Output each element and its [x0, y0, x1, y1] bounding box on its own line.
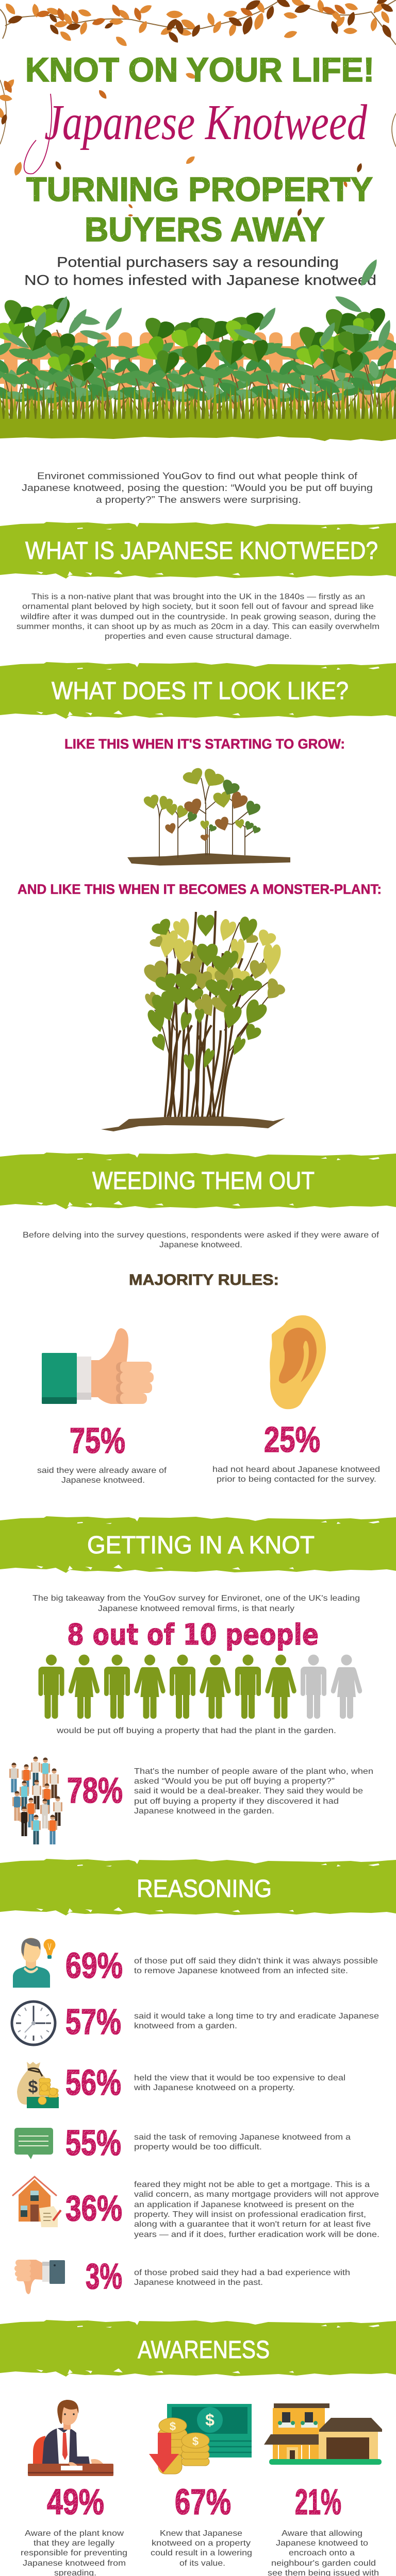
reason: 57%: said it would take a long time to try and eradicate Japanese: [134, 2012, 379, 2021]
caption: said they were already aware of: [37, 1466, 167, 1475]
subheading: majority rules: MAJORITY RULES:: [129, 1272, 279, 1289]
small leaf clusters: [0, 331, 396, 416]
reason: 3%: Japanese knotweed in the past.: [134, 2278, 263, 2287]
text block: encroach onto a: [289, 2549, 355, 2557]
text block: Japanese knotweed from: [23, 2559, 126, 2568]
pictogram: 8 of 10 people: [38, 1655, 362, 1719]
text block: [268, 2529, 379, 2576]
text block: Knew that Japanese: [160, 2529, 242, 2538]
icon: thumbs up: [42, 1328, 154, 1404]
grass: [0, 379, 396, 421]
subtitle: [24, 254, 376, 288]
caption: [37, 1466, 167, 1485]
reason: 57%: 57%: [65, 2002, 121, 2042]
reason: 3%: [86, 2256, 350, 2296]
reason: 56%: [65, 2062, 345, 2103]
subtitle: Potential purchasers say a resounding: [57, 254, 339, 270]
reason: 56%: with Japanese knotweed on a property.: [134, 2083, 295, 2092]
reason: 69%: to remove Japanese knotweed from an infected site.: [134, 1967, 348, 1975]
reason: 3%: 3%: [86, 2256, 122, 2296]
subheading: starting to grow: LIKE THIS WHEN IT'S STARTING TO GROW:: [64, 736, 345, 752]
text block: Aware of the plant know: [25, 2529, 124, 2538]
text block: Japanese knotweed to: [276, 2539, 368, 2548]
stat: 75%: 75%: [70, 1420, 125, 1461]
section banner: weeding them out: WEEDING THEM OUT: [92, 1167, 315, 1195]
reason: 56%: 56%: [65, 2062, 121, 2103]
intro paragraph: a property?” The answers were surprising.: [96, 495, 301, 505]
text block: what is japanese knotweed: wildfire after it was dumped out in the countryside. In peak growing season, during the: [20, 613, 376, 621]
stat: 21%: [268, 2482, 379, 2576]
section banner: weeding them out: [0, 1153, 396, 1209]
stat: 49%: 49%: [47, 2482, 104, 2522]
stat: 21%: 21%: [295, 2482, 341, 2522]
section banner: awareness: AWARENESS: [138, 2336, 270, 2364]
tall stems: [27, 322, 382, 412]
text block: what is japanese knotweed: properties and even cause structural damage.: [105, 632, 292, 641]
title: TURNING PROPERTY: [26, 170, 373, 208]
section banner: what does it look like: [0, 662, 396, 719]
reason: 69%: of those put off said they didn't think it was always possible: [134, 1957, 378, 1965]
icon: money and falling value: [149, 2404, 252, 2474]
text block: 78%: said it would be a deal-breaker. They said they would be: [134, 1787, 363, 1795]
icon: man with lightbulb: [13, 1938, 56, 1988]
reason: 69%: [65, 1945, 378, 1986]
reason: 55%: said the task of removing Japanese knotweed from a: [134, 2133, 351, 2142]
reason: 36%: valid concern, as many mortgage providers will not approve: [134, 2190, 379, 2199]
icon: money and falling value: $: [205, 2411, 214, 2429]
script heading: [24, 94, 368, 174]
intro paragraph: [22, 471, 373, 505]
caption: put off buying: would be put off buying a property that had the plant in the garden.: [56, 1726, 336, 1735]
text block: what is japanese knotweed: ornamental plant beloved by high society, but it soon fell out of favour and spread like: [22, 602, 374, 611]
icon: ear: [270, 1315, 326, 1409]
headline stat: 8 out of 10 people: 8 out of 10 people: [67, 1618, 319, 1652]
text block: 78%: put off buying a property if they discovered it had: [134, 1797, 339, 1806]
reason: 55%: 55%: [65, 2123, 121, 2163]
text block: what is japanese knotweed: This is a non-native plant that was brought into the UK in the 1840s — firstly as an: [31, 592, 365, 601]
stat: 67%: 67%: [175, 2482, 231, 2522]
icon: money bag with coins: $: [28, 2077, 38, 2097]
title: BUYERS AWAY: [85, 210, 325, 248]
reason: 36%: years — and if it does, further eradication work will be done.: [134, 2230, 380, 2239]
icon: crowd of people: [9, 1756, 62, 1844]
stat: 49%: [21, 2482, 127, 2576]
subheading: monster plant: AND LIKE THIS WHEN IT BECOMES A MONSTER-PLANT:: [18, 882, 382, 897]
reason: 36%: along with a guarantee that it won't return for at least five: [134, 2220, 371, 2229]
subtitle: NO to homes infested with Japanese knotweed: [24, 272, 376, 288]
text block: 78%: That's the number of people aware of the plant who, when: [134, 1767, 373, 1776]
text block: awareness question: Before delving into the survey questions, respondents were asked if they were aware of: [23, 1231, 380, 1240]
text block: 78%: Japanese knotweed in the garden.: [134, 1807, 274, 1816]
text block: that they are legally: [34, 2539, 114, 2548]
icon: neighbouring houses: [264, 2403, 382, 2465]
reason: 57%: [65, 2002, 379, 2042]
text block: [151, 2529, 252, 2568]
reason: 3%: of those probed said they had a bad experience with: [134, 2268, 350, 2277]
reason: 56%: held the view that it would be too expensive to deal: [134, 2074, 345, 2082]
icon: house with contract: [12, 2177, 61, 2227]
reason: 69%: 69%: [65, 1945, 123, 1986]
reason: 36%: [65, 2180, 380, 2239]
intro paragraph: Japanese knotweed, posing the question: “Would you be put off buying: [22, 483, 373, 493]
icon: speech bubble: [14, 2128, 53, 2159]
text block: could result in a lowering: [151, 2549, 252, 2557]
text block: responsible for preventing: [21, 2549, 127, 2557]
section banner: getting in a knot: GETTING IN A KNOT: [87, 1532, 315, 1559]
caption: [212, 1465, 380, 1484]
text block: what is japanese knotweed: summer months, it can shoot up by as much as 20cm in a day. This can easily overwhelm: [16, 622, 380, 631]
caption: Japanese knotweed.: [61, 1476, 145, 1485]
intro paragraph: Environet commissioned YouGov to find out what people think of: [37, 471, 358, 481]
text block: knotweed on a property: [152, 2539, 251, 2548]
young knotweed plant: [127, 767, 290, 866]
section banner: getting in a knot: [0, 1516, 396, 1573]
lance leaves: [1, 257, 393, 351]
reason: 36%: feared they might not be able to get a mortgage. This is a: [134, 2180, 370, 2189]
hero illustration: knotweed along fence: [0, 257, 396, 441]
text block: awareness question: [23, 1231, 380, 1249]
reason: 57%: knotweed from a garden.: [134, 2022, 237, 2030]
text block: what is japanese knotweed: [16, 592, 380, 641]
stat: 25%: [212, 1419, 380, 1484]
text block: 78%: asked “Would you be put off buying a property?”: [134, 1777, 335, 1786]
section banner: reasoning: [0, 1859, 396, 1916]
text block: Aware that allowing: [282, 2529, 362, 2538]
text block: big takeaway: The big takeaway from the YouGov survey for Environet, one of the UK's leading: [32, 1594, 360, 1603]
stat: 78%: 78%: [67, 1770, 123, 1810]
text block: awareness question: Japanese knotweed.: [159, 1241, 242, 1249]
mature knotweed monster plant: [101, 911, 287, 1131]
icon: money and falling value: $: [192, 2435, 199, 2448]
icon: clock: [12, 2002, 55, 2045]
text block: big takeaway: [32, 1594, 360, 1613]
big heart leaves: [0, 295, 389, 384]
section banner: what does it look like: WHAT DOES IT LOOK LIKE?: [52, 677, 349, 705]
stat: 25%: 25%: [264, 1419, 320, 1460]
text block: of its value.: [179, 2559, 225, 2568]
text block: [21, 2529, 127, 2576]
reason: 36%: 36%: [65, 2188, 122, 2228]
text block: neighbour's garden could: [271, 2559, 376, 2568]
section banner: awareness: [0, 2320, 396, 2377]
text block: big takeaway: Japanese knotweed removal firms, is that nearly: [98, 1604, 294, 1613]
stat: 67%: [151, 2482, 252, 2568]
reason: 36%: property. They will insist on professional eradication first,: [134, 2210, 366, 2219]
section banner: what is japanese knotweed: [0, 522, 396, 579]
stat: 75%: [37, 1420, 167, 1485]
section banner: reasoning: REASONING: [137, 1875, 272, 1903]
reason: 36%: an application if Japanese knotweed is present on the: [134, 2200, 354, 2209]
reason: 55%: [65, 2123, 351, 2163]
fence: [0, 330, 396, 410]
title: KNOT ON YOUR LIFE!: [25, 50, 374, 89]
icon: money and falling value: $: [170, 2420, 176, 2433]
icon: money bag with coins: [17, 2062, 59, 2108]
title: [24, 50, 374, 248]
icon: businessman at desk: [28, 2400, 113, 2476]
reason: 55%: property would be too difficult.: [134, 2143, 262, 2151]
text block: 78%: [134, 1767, 373, 1816]
caption: prior to being contacted for the survey.: [217, 1475, 376, 1484]
autumn leaf garland: [0, 0, 396, 217]
caption: had not heard about Japanese knotweed: [212, 1465, 380, 1474]
icon: thumbs down: [14, 2260, 65, 2294]
